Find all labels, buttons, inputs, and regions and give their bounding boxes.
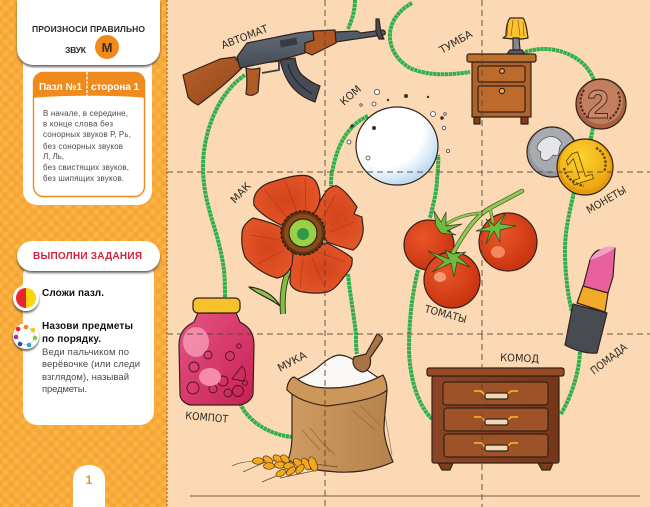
lamp bbox=[503, 18, 528, 39]
scoop bbox=[353, 334, 382, 372]
rifle barrel bbox=[335, 30, 385, 42]
center bbox=[281, 211, 325, 255]
rifle receiver bbox=[237, 31, 314, 68]
label: КОМ: КОМ bbox=[338, 83, 364, 108]
label: МУКА: МУКА bbox=[276, 349, 310, 375]
fruit inside bbox=[187, 344, 247, 397]
drawer 1 bbox=[443, 382, 548, 405]
coin 2: 2 bbox=[587, 83, 609, 127]
drawers bbox=[478, 66, 525, 82]
tomato left bbox=[404, 220, 454, 270]
label: МОНЕТЫ: МОНЕТЫ bbox=[584, 184, 629, 217]
tomato right bbox=[479, 213, 537, 271]
heading: pronounce the sound: ЗВУК bbox=[65, 45, 87, 55]
puzzle cut lines bbox=[167, 0, 650, 507]
task 2 text bbox=[42, 321, 140, 395]
table body bbox=[472, 62, 531, 117]
description text: без сонорных звуков bbox=[43, 142, 123, 151]
box header bbox=[33, 72, 145, 98]
vine bbox=[445, 191, 522, 253]
icon: coins bbox=[527, 79, 626, 195]
label: КОМОД: КОМОД bbox=[500, 352, 539, 365]
description text: без шипящих звуков. bbox=[43, 174, 124, 183]
tasks heading bbox=[17, 241, 160, 271]
icon: snowball bbox=[347, 89, 450, 185]
icon: puzzle halves bbox=[13, 285, 39, 311]
box header: сторона 1 bbox=[91, 82, 139, 93]
label: АВТОМАТ: АВТОМАТ bbox=[220, 23, 270, 52]
rifle stock bbox=[183, 57, 242, 105]
petals bbox=[313, 186, 363, 250]
tasks heading: ВЫПОЛНИ ЗАДАНИЯ bbox=[33, 251, 142, 262]
description text bbox=[43, 109, 131, 183]
description text: без свистящих звуков, bbox=[43, 163, 129, 172]
task 1 text: Сложи пазл. bbox=[42, 288, 104, 299]
icon: bedside table with lamp bbox=[467, 18, 536, 124]
task 2 text: Веди пальчиком по bbox=[42, 347, 129, 358]
page number tab: 1 bbox=[86, 473, 93, 487]
tomato bottom bbox=[424, 252, 480, 308]
background: left orange sidebar bbox=[0, 0, 167, 507]
case bbox=[565, 304, 607, 353]
panel: tasks bbox=[13, 241, 160, 425]
wheat bbox=[232, 453, 338, 482]
label: МАК: МАК bbox=[228, 180, 254, 206]
description text: Л, Ль, bbox=[43, 152, 64, 161]
icon: lipstick bbox=[565, 247, 615, 353]
description text: В начале, в середине, bbox=[43, 109, 128, 118]
label: КОМПОТ: КОМПОТ bbox=[185, 410, 229, 426]
rifle magazine bbox=[280, 58, 320, 102]
silver coin bbox=[527, 127, 577, 177]
gold coin 1: 1 bbox=[559, 141, 598, 195]
drawer 3 bbox=[444, 434, 548, 457]
stem and leaf bbox=[283, 272, 288, 314]
calyx leaves bbox=[428, 211, 516, 277]
task 2 text: по порядку. bbox=[42, 334, 101, 345]
label: ТОМАТЫ: ТОМАТЫ bbox=[422, 303, 468, 326]
icon: chest of drawers bbox=[427, 368, 564, 470]
label: ТУМБА: ТУМБА bbox=[437, 28, 475, 57]
icon: letter М badge: М bbox=[102, 40, 112, 55]
description text: сонорных звуков Р, Рь, bbox=[43, 130, 131, 139]
drawer 2 bbox=[444, 408, 548, 431]
rifle handguard bbox=[305, 30, 336, 55]
gold ring bbox=[577, 286, 608, 312]
flour bbox=[296, 355, 379, 396]
sack rim bbox=[287, 375, 387, 406]
jar body bbox=[179, 313, 254, 405]
task 2 text: взглядом), называй bbox=[42, 372, 129, 383]
rifle grip bbox=[246, 68, 260, 95]
icon: tomatoes on a vine bbox=[404, 191, 537, 308]
task 2 text: Назови предметы bbox=[42, 321, 133, 332]
page number tab bbox=[73, 465, 105, 507]
heading: pronounce the sound: ПРОИЗНОСИ ПРАВИЛЬНО bbox=[32, 24, 145, 34]
jar lid bbox=[193, 298, 240, 313]
bullet bbox=[583, 248, 615, 293]
body bbox=[432, 376, 559, 463]
icon: assault rifle bbox=[183, 19, 385, 105]
feet bbox=[438, 463, 453, 470]
sack body bbox=[288, 390, 393, 472]
icon: jar of compote bbox=[179, 298, 254, 405]
top board bbox=[427, 368, 564, 376]
icon: colored beads ring bbox=[13, 323, 39, 349]
task 2 text: предметы. bbox=[42, 384, 87, 395]
icon: flour sack with scoop and wheat bbox=[232, 334, 393, 482]
background: right puzzle area bbox=[167, 0, 650, 507]
icon: poppy flower bbox=[242, 175, 363, 314]
icon: letter М badge bbox=[95, 35, 119, 59]
description text: в конце слова без bbox=[43, 120, 113, 128]
orange outlined box bbox=[34, 72, 144, 196]
label: ПОМАДА: ПОМАДА bbox=[588, 341, 630, 377]
box header: Пазл №1 bbox=[39, 82, 82, 93]
heading: pronounce the sound bbox=[17, 0, 160, 65]
rope: green path linking the objects bbox=[203, 0, 594, 437]
task 2 text: верёвочке (или следи bbox=[42, 359, 140, 370]
panel: puzzle description bbox=[23, 40, 152, 205]
